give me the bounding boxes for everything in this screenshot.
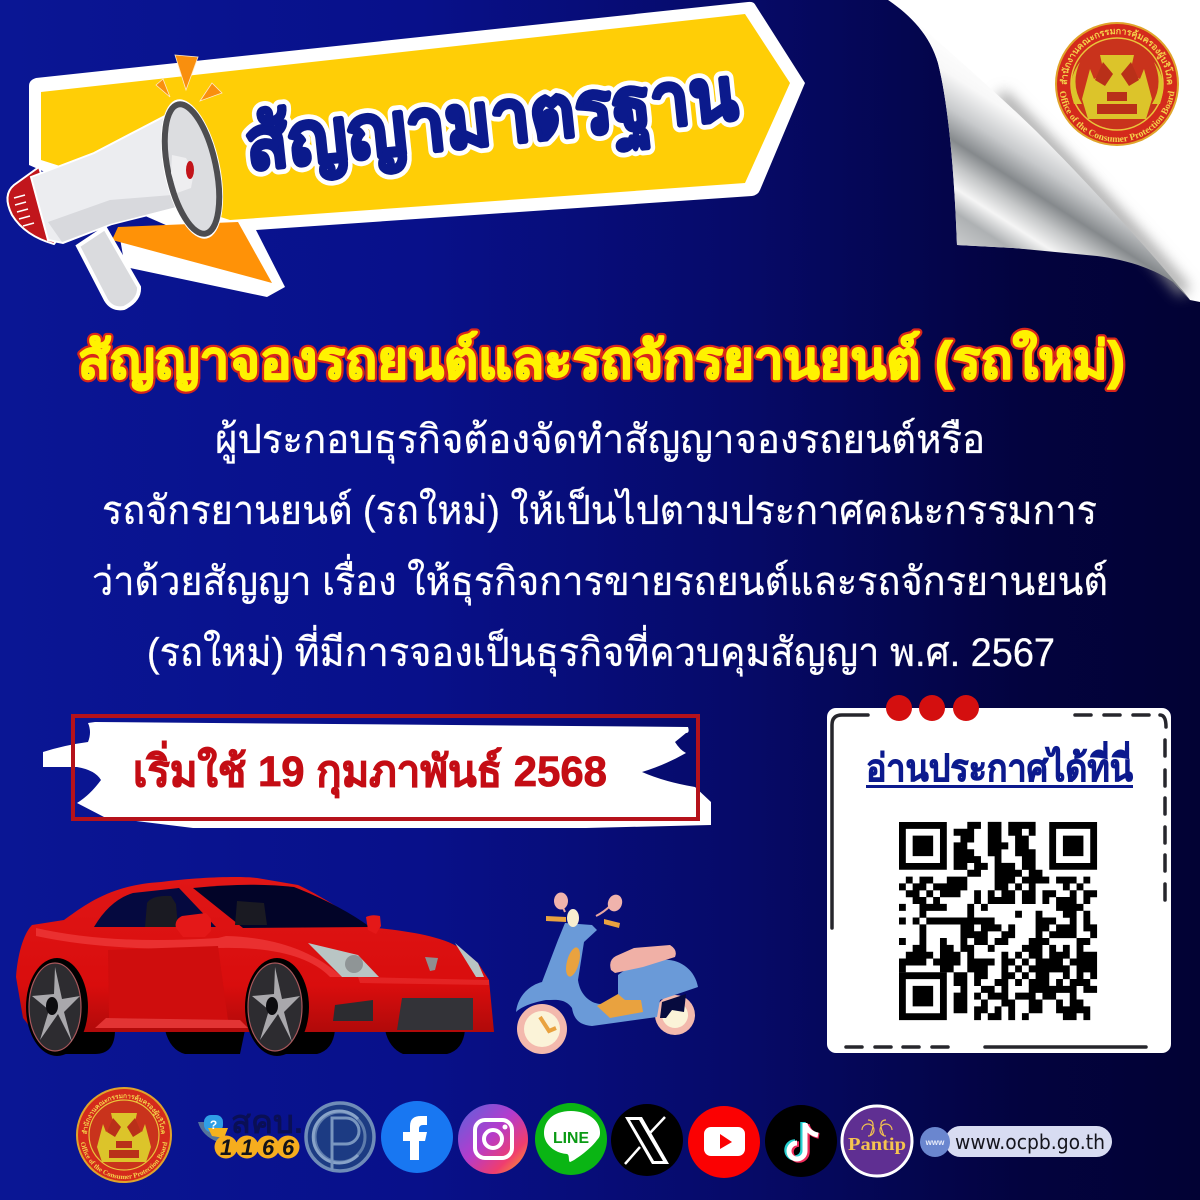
text block: description: รถจักรยานยนต์ (รถใหม่) ให้เป็นไปตามประกาศคณะกรรมการ [102, 486, 1097, 533]
icon: TikTok [765, 1105, 837, 1177]
seal: footer: Office of the Consumer Protection Board [81, 1142, 168, 1180]
website link: www [925, 1138, 945, 1147]
text block: description [92, 417, 1108, 677]
seal: top right: Office of the Consumer Protection Board [1060, 91, 1174, 142]
text block: description: ผู้ประกอบธุรกิจต้องจัดทำสัญญาจองรถยนต์หรือ [215, 417, 985, 464]
callout: effective date: เริ่มใช้ 19 กุมภาพันธ์ 2568 [133, 741, 607, 799]
logo: hotline 1166 [198, 1104, 303, 1160]
seal: top right [1055, 22, 1179, 146]
logo: OCPB circle [306, 1103, 374, 1171]
rear wheel [26, 958, 88, 1056]
banner: arrow title ribbon [29, 2, 805, 297]
seal: footer: สำนักงานคณะกรรมการคุ้มครองผู้บริโภค [82, 1094, 166, 1134]
heading: contract subject: สัญญาจองรถยนต์และรถจักรยานยนต์ (รถใหม่) [78, 330, 1125, 391]
panel: QR code card [827, 695, 1171, 1053]
callout: effective date [43, 716, 711, 828]
heading: contract subject: สัญญาจองรถยนต์และรถจักรยานยนต์ (รถใหม่) [78, 330, 1125, 391]
title: สัญญามาตรฐาน [241, 52, 742, 193]
logo: hotline 1166: สคบ. [231, 1104, 303, 1140]
QR code [899, 822, 1097, 1020]
icon: Facebook [381, 1101, 453, 1173]
logo: Pantip [842, 1106, 912, 1176]
icon: YouTube [688, 1106, 760, 1178]
website link: www.ocpb.go.th [955, 1130, 1105, 1154]
illustration: blue scooter [516, 892, 698, 1054]
text block: description: (รถใหม่) ที่มีการจองเป็นธุรกิจที่ควบคุมสัญญา พ.ศ. 2567 [147, 625, 1055, 677]
seal: top right: สำนักงานคณะกรรมการคุ้มครองผู้บริโภค [1060, 28, 1174, 84]
icon: megaphone [7, 55, 234, 308]
icon: X [611, 1104, 683, 1176]
icon: Instagram [458, 1104, 528, 1174]
heading: read announcement here: อ่านประกาศได้ที่นี่ [866, 741, 1133, 790]
icon: LINE: LINE [553, 1130, 589, 1147]
illustration: red car [16, 877, 494, 1056]
website link [920, 1126, 1112, 1157]
logo: Pantip: Pantip [848, 1134, 906, 1154]
logo: hotline 1166: 1166 [220, 1135, 295, 1160]
logo: hotline 1166: ? [210, 1118, 217, 1132]
icon: LINE [535, 1103, 607, 1175]
page curl corner [888, 0, 1200, 302]
text block: description: ว่าด้วยสัญญา เรื่อง ให้ธุรกิจการขายรถยนต์และรถจักรยานยนต์ [92, 554, 1108, 606]
seal: footer [76, 1087, 172, 1183]
title: สัญญามาตรฐาน [241, 52, 742, 193]
front wheel [245, 958, 309, 1056]
